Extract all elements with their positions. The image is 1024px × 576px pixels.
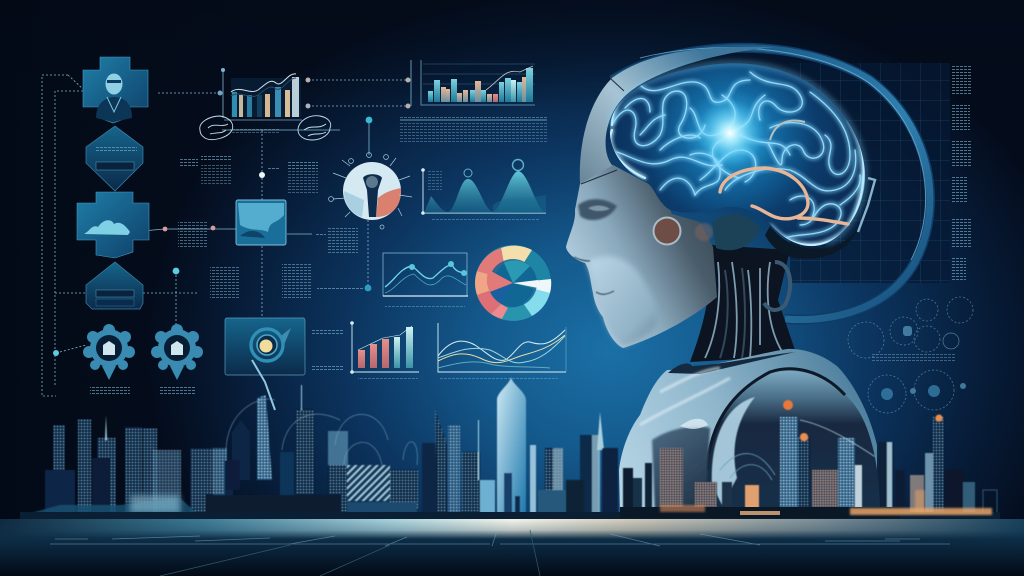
brain outlines	[200, 116, 331, 140]
gear icon left	[83, 324, 135, 395]
plus panel: landscape chart	[77, 192, 149, 258]
collar opening	[668, 352, 795, 374]
eye socket	[578, 199, 617, 220]
node dots	[53, 68, 410, 356]
ear dial	[652, 216, 713, 246]
head shell	[566, 47, 775, 348]
gears diagram lower right	[848, 297, 973, 413]
pale nerve	[770, 121, 805, 140]
bar chart: top left	[224, 74, 302, 120]
collar highlights	[640, 368, 730, 425]
donut infographic with figure	[329, 153, 412, 229]
dial panel	[225, 318, 305, 410]
orange base glow	[20, 490, 1000, 520]
brain folds	[610, 72, 864, 245]
hexagon panel: card	[86, 262, 143, 309]
line chart: nodes	[383, 253, 468, 307]
pie chart	[475, 245, 551, 321]
area chart: mountains	[421, 160, 546, 220]
shoulder dark reflection	[652, 426, 710, 516]
icon: person bust	[96, 74, 132, 122]
construction arcs	[226, 399, 417, 465]
halo ring around the head	[612, 48, 930, 320]
floor	[0, 519, 1024, 576]
forehead seam	[581, 78, 624, 184]
connector lines	[42, 60, 411, 396]
dome seam	[707, 369, 845, 470]
gear icon right	[151, 324, 203, 395]
dome reflection	[712, 397, 755, 505]
hexagon panel: text card	[86, 126, 143, 191]
robot head	[566, 47, 775, 348]
brain core glow	[696, 99, 764, 167]
neck mechanics	[690, 245, 797, 362]
right skyline	[538, 412, 997, 516]
brain clip bracket	[858, 178, 875, 232]
left skyline	[20, 377, 536, 516]
city in dome	[720, 400, 880, 516]
robot shoulders	[619, 349, 880, 516]
bar chart: top right	[421, 60, 535, 105]
plus panel: person	[83, 57, 148, 123]
right grid panel	[790, 63, 972, 283]
cheek highlight	[587, 256, 657, 346]
cloud reflection	[680, 419, 708, 429]
orange nerve band	[720, 168, 848, 224]
eye	[588, 205, 610, 211]
nostril and lips	[574, 257, 614, 294]
text blocks	[178, 115, 547, 371]
neck junction bundle	[712, 214, 858, 259]
dome shell	[702, 371, 880, 516]
brain outer glow	[610, 63, 865, 243]
icon: area chart	[84, 220, 130, 235]
bar chart: rising	[350, 321, 419, 379]
glowing brain	[610, 63, 875, 246]
arm	[252, 360, 275, 410]
wave line chart	[438, 323, 566, 379]
image panel: mountain	[236, 200, 286, 245]
orange towers	[623, 448, 759, 516]
face	[566, 165, 717, 348]
